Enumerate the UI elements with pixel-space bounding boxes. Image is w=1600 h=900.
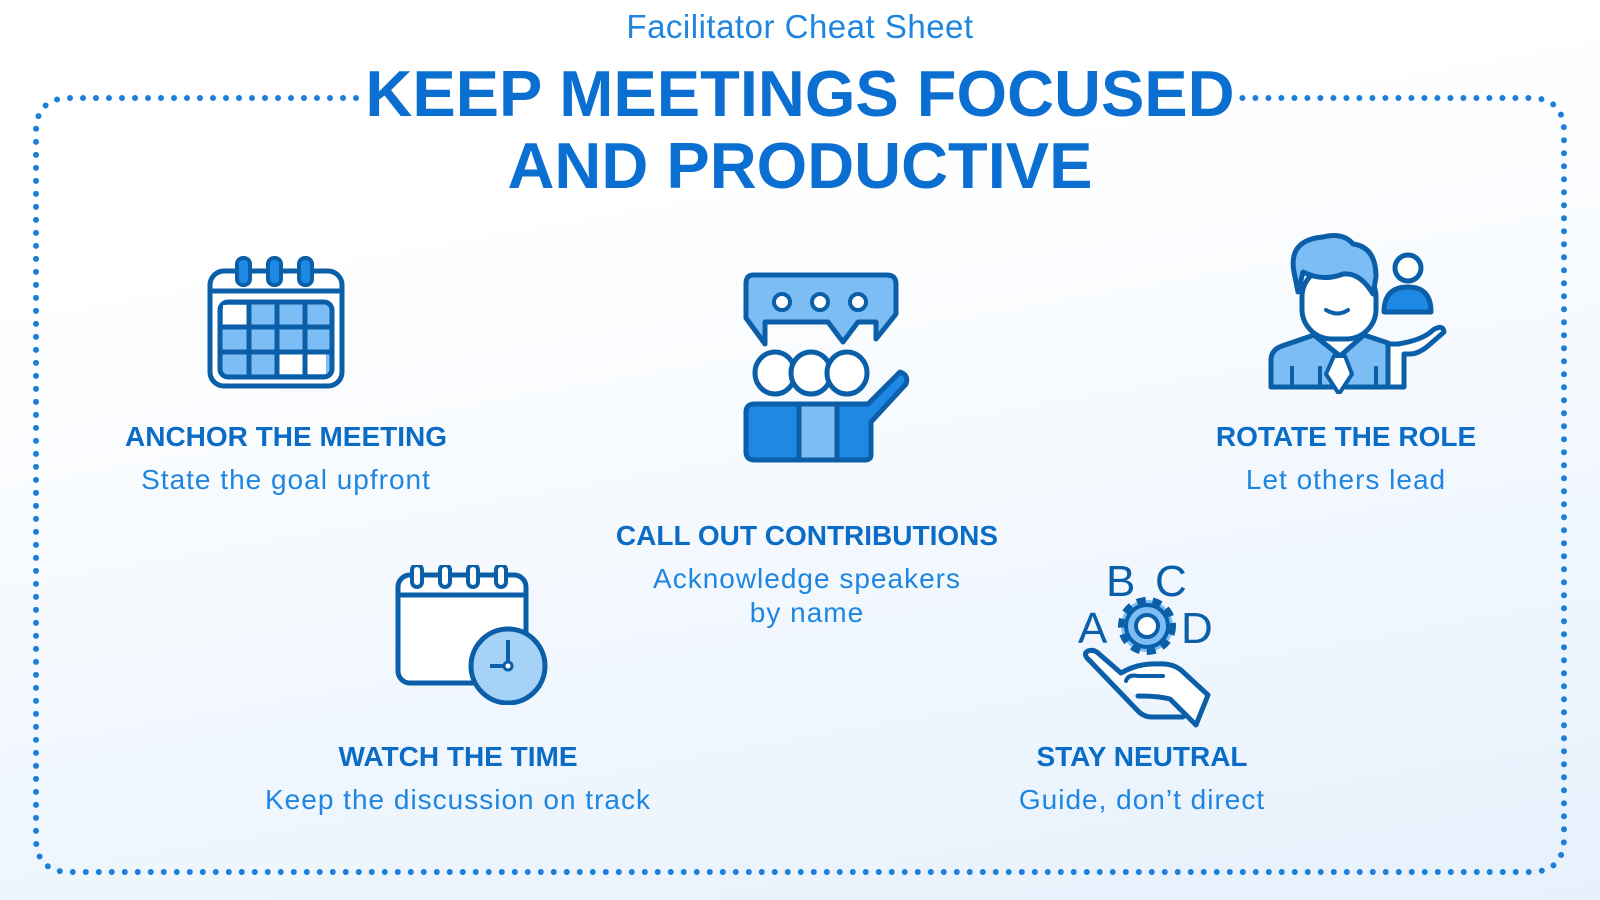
title: AND PRODUCTIVE (507, 129, 1093, 202)
heading: anchor: ANCHOR THE MEETING (125, 421, 447, 452)
kicker: Facilitator Cheat Sheet (626, 8, 974, 45)
heading: stay neutral: STAY NEUTRAL (1036, 741, 1248, 772)
heading: watch time: WATCH THE TIME (338, 741, 578, 772)
icon: person with role (1268, 233, 1446, 394)
title: KEEP MEETINGS FOCUSED (365, 57, 1235, 130)
icon: speech people (744, 272, 910, 462)
icon: gear hand letters: C (1155, 557, 1187, 606)
icon: gear hand letters: A (1078, 604, 1108, 653)
text: watch time: Keep the discussion on track (265, 784, 651, 815)
text: call out: Acknowledge speakers (653, 563, 961, 594)
icon: gear hand letters: B (1106, 557, 1135, 606)
heading: rotate: ROTATE THE ROLE (1216, 421, 1476, 452)
title (365, 57, 1235, 202)
icon: calendar (208, 256, 344, 388)
icon: gear hand letters (1078, 557, 1213, 728)
text: call out: by name (750, 597, 864, 628)
icon: gear hand letters: D (1181, 604, 1213, 653)
heading: call out: CALL OUT CONTRIBUTIONS (616, 520, 998, 551)
icon: calendar clock (396, 565, 548, 705)
text: anchor: State the goal upfront (141, 464, 431, 495)
text: stay neutral: Guide, don’t direct (1019, 784, 1265, 815)
text: rotate: Let others lead (1246, 464, 1446, 495)
text: call out (653, 563, 961, 628)
